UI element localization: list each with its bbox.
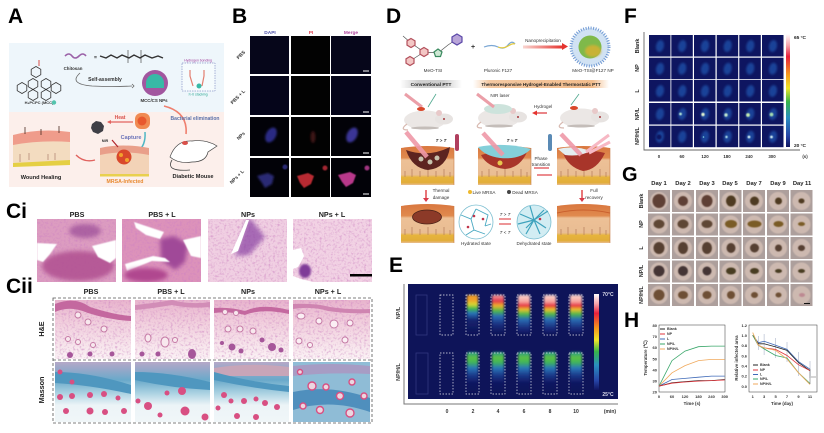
bacteria legend: Live MRSA [473,190,496,195]
chart: relative infected area [734,323,817,406]
infected skin: NIR [102,139,109,143]
MeO-TSI@F127 nanoparticle: MeO-TSI@F127 NP [572,68,614,73]
x axis labels [658,394,729,399]
plot frame [749,325,817,392]
row labels [229,49,247,186]
panel B: fluorescence staining grid [229,5,371,197]
x axis labels: 180 [695,394,703,399]
y axis labels [741,323,748,389]
wound photos [648,190,812,306]
time axis labels: 4 [497,409,500,415]
skin: hydrated hydrogel [478,133,552,185]
x axis labels: 300 [721,394,729,399]
hydrated network [459,205,493,246]
thermal image background [408,284,618,399]
panel letter E: E [389,254,403,277]
H&E images [55,300,370,359]
time labels: (s) [802,154,808,159]
legend: L [667,337,670,341]
image PBS [37,219,116,282]
bacteria cluster and heat arrow: Heat [115,115,126,121]
y axis labels: 0.2 [741,374,748,378]
column labels: NPs + L [315,287,342,296]
x axis labels: 1 [752,394,755,399]
y axis labels: 30 [653,378,658,384]
bacteria legend: Dead MRSA [512,190,539,195]
arrow: full recovery [579,188,604,202]
header: thermoresponsive PTT [473,80,609,88]
panel letter D: D [386,5,401,28]
NP/H/L tubes [467,352,582,392]
mouse: hydrogel with NIR laser [477,93,527,128]
row labels: NP [639,220,645,228]
error bars [758,334,810,378]
chart: temperature over time [643,323,729,406]
row labels: Blank [635,39,641,53]
hydrogen bonding inset: π-π stacking [188,92,208,96]
diabetic mouse [170,141,217,180]
row labels [37,321,46,403]
chitosan formula: = [94,55,97,61]
colour scale: 20 °C [794,143,807,149]
legend: NP/L [667,342,676,346]
scale bar [804,303,810,304]
bacteria legend [468,190,539,195]
row labels: Masson [37,377,46,403]
panel G: wound photographs over time [622,164,812,306]
column headers: Merge [344,30,358,36]
x axis labels: 5 [774,394,777,399]
dehydrated network: Dehydrated state [516,241,552,246]
panel letter A: A [8,5,23,28]
panel letter B: B [232,5,247,28]
nanoprecipitation arrow: Nanoprecipitation [525,38,561,43]
y axis labels: 0.4 [741,364,748,368]
diabetic mouse: Diabetic Mouse [172,174,214,180]
infected skin [100,139,149,185]
mouse: hydrogel with NIR laser: NIR laser [490,93,510,98]
phase transition arrows: transition [532,162,551,167]
time axis labels: 8 [549,409,552,415]
row labels: NP/L [396,306,402,319]
scale bar [350,274,372,276]
row labels: NP/L [639,264,645,277]
time labels: 300 [768,154,776,159]
row labels: PBS + L [230,89,247,106]
MCC/CS nanoparticle: MCC/CS NPs [140,98,168,103]
lower pink background [9,112,224,187]
row labels: NP/H/L [396,362,402,381]
significance bracket [810,369,816,384]
Masson images [55,362,370,422]
hot spots [656,113,773,140]
time labels [658,154,808,159]
healed skin: Wound Healing [21,175,62,181]
arrow: thermal damage: Thermal [433,188,449,193]
y axis labels: 0.0 [741,384,748,389]
panel A: nanoparticle synthesis and wound healing schematic [8,5,224,187]
legend: Blank [760,363,770,367]
colour scale [786,34,807,149]
day labels: Day 1 [651,181,668,187]
row labels: NP [635,64,641,72]
column headers: DAPI [264,30,276,36]
plus sign: + [471,44,475,51]
time labels: 180 [723,154,731,159]
scale bars [363,71,369,194]
plot frame and ticks [659,325,725,392]
colour scale: 70°C [602,292,614,298]
nanoprecipitation arrow [523,38,568,50]
y axis labels: 50 [653,356,658,362]
day labels: Day 3 [699,181,716,187]
bacterial elimination arrow [164,106,219,134]
skin: fully recovered [557,204,610,243]
arrow: thermal damage [423,188,450,202]
y axis labels: 1.0 [741,333,748,338]
porphyrin molecule: H₄PCPC (MCC) [25,100,54,105]
image PBS + L [122,219,201,282]
legend: NP [667,332,673,336]
temperature switching arrows: T < T [500,230,512,235]
bacterial elimination arrow: Bacterial elimination [171,116,219,122]
MeO-TSI molecule: MeO-TSI [424,68,442,73]
Pluronic F127 [484,42,515,73]
time axis labels: 10 [573,409,579,415]
axis titles: Temperature (℃) [643,340,648,376]
Pluronic F127: Pluronic F127 [484,68,513,73]
row labels: L [635,89,641,93]
axis titles: Relative infected area [734,335,739,381]
legend: NP [760,368,766,372]
row labels: L [639,246,645,250]
column labels: PBS + L [148,210,176,219]
wound healing arrow [76,155,95,161]
wound scabs [652,194,805,300]
time axis labels: 6 [523,409,526,415]
axis titles [643,340,701,406]
day labels: Day 9 [770,181,787,187]
legend [753,363,773,386]
mouse: conventional [403,94,453,130]
self-assembly arrow: Self-assembly [88,77,122,83]
x axis labels: 240 [708,394,716,399]
panel letter Cii: Cii [6,275,33,298]
hydrogen bonding inset: Hydrogen bonding [184,58,212,62]
axis titles: Time (s) [684,401,701,406]
column labels [84,287,342,296]
legend: L [760,372,763,376]
data lines [753,333,810,384]
time labels: 0 [658,154,661,159]
y axis labels: 80 [653,323,658,328]
x axis labels: 7 [786,394,789,399]
healed skin [13,126,70,181]
x axis labels [752,394,813,399]
MeO-TSI molecule [403,34,462,73]
x axis labels: 11 [808,394,813,399]
panel D: conventional vs thermoresponsive PTT schematic [386,5,614,246]
axis titles [734,335,793,406]
day labels: Day 5 [722,181,739,187]
dashed tube outlines [440,295,583,394]
panel letter Ci: Ci [6,200,27,223]
arrow: thermal damage: damage [433,195,450,200]
temperature switching arrows [499,212,512,235]
NP/L tubes [467,295,582,333]
row labels [639,194,645,304]
hydrogen bonding inset [182,58,215,96]
y axis labels: 60 [653,345,658,350]
y axis labels: 0.6 [741,354,748,358]
image NPs [208,219,287,282]
legend: NP/L [760,377,769,381]
panel Ci: histology images [6,200,372,282]
y axis labels: 40 [653,368,658,372]
day labels [651,181,812,187]
porphyrin molecule [17,60,61,105]
legend: NP/H/L [667,347,680,351]
colour scale [594,292,614,398]
hydrogel arrow [532,104,552,116]
axes [404,284,618,404]
hydrogel arrow: Hydrogel [534,104,552,109]
chitosan formula [64,50,163,71]
panel H: temperature and infected area line charts [624,309,817,406]
panel F: in vivo thermal imaging grid [624,5,808,159]
y axis labels: 1.2 [741,323,748,328]
phase transition arrows [532,156,552,175]
capture arrow: Capture [121,135,141,141]
x axis labels: 120 [682,394,689,399]
image NPs + L [293,219,372,282]
row labels: NP/L [635,107,641,120]
empty reference tubes [416,295,428,394]
x axis labels: 60 [670,394,675,399]
panel letter F: F [624,5,637,28]
skin: dehydrated hydrogel [557,134,610,185]
x axis labels: 9 [797,394,800,399]
skin: conventional treatment [401,132,459,185]
row labels [396,306,402,381]
temperature switching arrows: T > T [500,212,512,217]
panel letter H: H [624,309,639,332]
axis titles: Time (day) [771,401,793,406]
microscopy cells [250,36,371,197]
MeO-TSI@F127 nanoparticle [571,28,614,73]
thermal cells [649,35,784,147]
y axis labels: 0.8 [741,343,748,348]
time axis labels: (min) [604,409,616,415]
bacteria cluster and heat arrow [91,113,150,134]
mouse: pre-treatment [559,94,609,128]
skin: damaged wound [401,204,454,243]
time labels: 240 [745,154,753,159]
arrow: full recovery: recovery [585,195,604,200]
legend: Blank [667,327,677,331]
MCC/CS nanoparticle [140,70,168,103]
row labels [635,39,641,145]
dashed frames [53,298,372,423]
y axis labels [653,323,658,394]
y axis labels: 20 [653,390,658,394]
arrow: full recovery: Full [590,188,598,193]
phase transition arrows: Phase [534,156,548,161]
chitosan formula: Chitosan [64,66,83,71]
row labels: PBS [236,49,247,61]
time labels: 120 [701,154,709,159]
axes [644,32,800,150]
legend [660,327,680,351]
panel E: tube thermal images [389,254,618,415]
time labels: 60 [680,154,685,159]
time axis labels: 2 [472,409,475,415]
skin: conventional treatment: T > T [436,138,448,143]
x axis labels: 0 [658,394,661,399]
upper blue background [9,43,224,112]
header: conventional PTT [400,80,462,88]
legend: NP/H/L [760,382,773,386]
column labels [70,210,346,219]
column labels: NPs [241,210,255,219]
row labels: NPs + L [229,169,246,186]
column labels: PBS + L [157,287,185,296]
column labels: PBS [84,287,99,296]
column labels: PBS [70,210,85,219]
panel letter G: G [622,164,638,186]
time axis labels: 0 [446,409,449,415]
x axis labels: 3 [763,394,766,399]
column labels: NPs [241,287,255,296]
y axis labels: 70 [653,334,658,339]
header: conventional PTT: Conventional PTT [411,82,451,88]
header: thermoresponsive PTT: Thermoresponsive Hydrogel-Enabled Thermostatic PTT [481,82,601,87]
self-assembly arrow [76,73,134,88]
day labels: Day 7 [746,181,762,187]
colour scale: 65 °C [794,35,807,41]
row labels: Blank [639,194,645,208]
row labels: H&E [37,321,46,337]
column labels: NPs + L [319,210,346,219]
row labels: NP/H/L [639,285,645,304]
column headers: PI [309,30,314,36]
column headers [264,30,358,36]
day labels: Day 11 [793,181,812,187]
time axis labels [446,409,616,415]
capture arrow [121,132,145,152]
day labels: Day 2 [675,181,691,187]
data lines [659,346,725,386]
row labels: NP/H/L [635,126,641,145]
hydrated network: Hydrated state [461,241,491,246]
row labels: NPs [236,131,247,142]
panel Cii: H&E and Masson histology [6,275,372,423]
dehydrated network [516,205,552,246]
infected skin: MRSA-Infected [107,179,143,185]
skin: hydrated hydrogel: T ≈ T [507,138,519,143]
colour scale: 25°C [602,392,614,398]
